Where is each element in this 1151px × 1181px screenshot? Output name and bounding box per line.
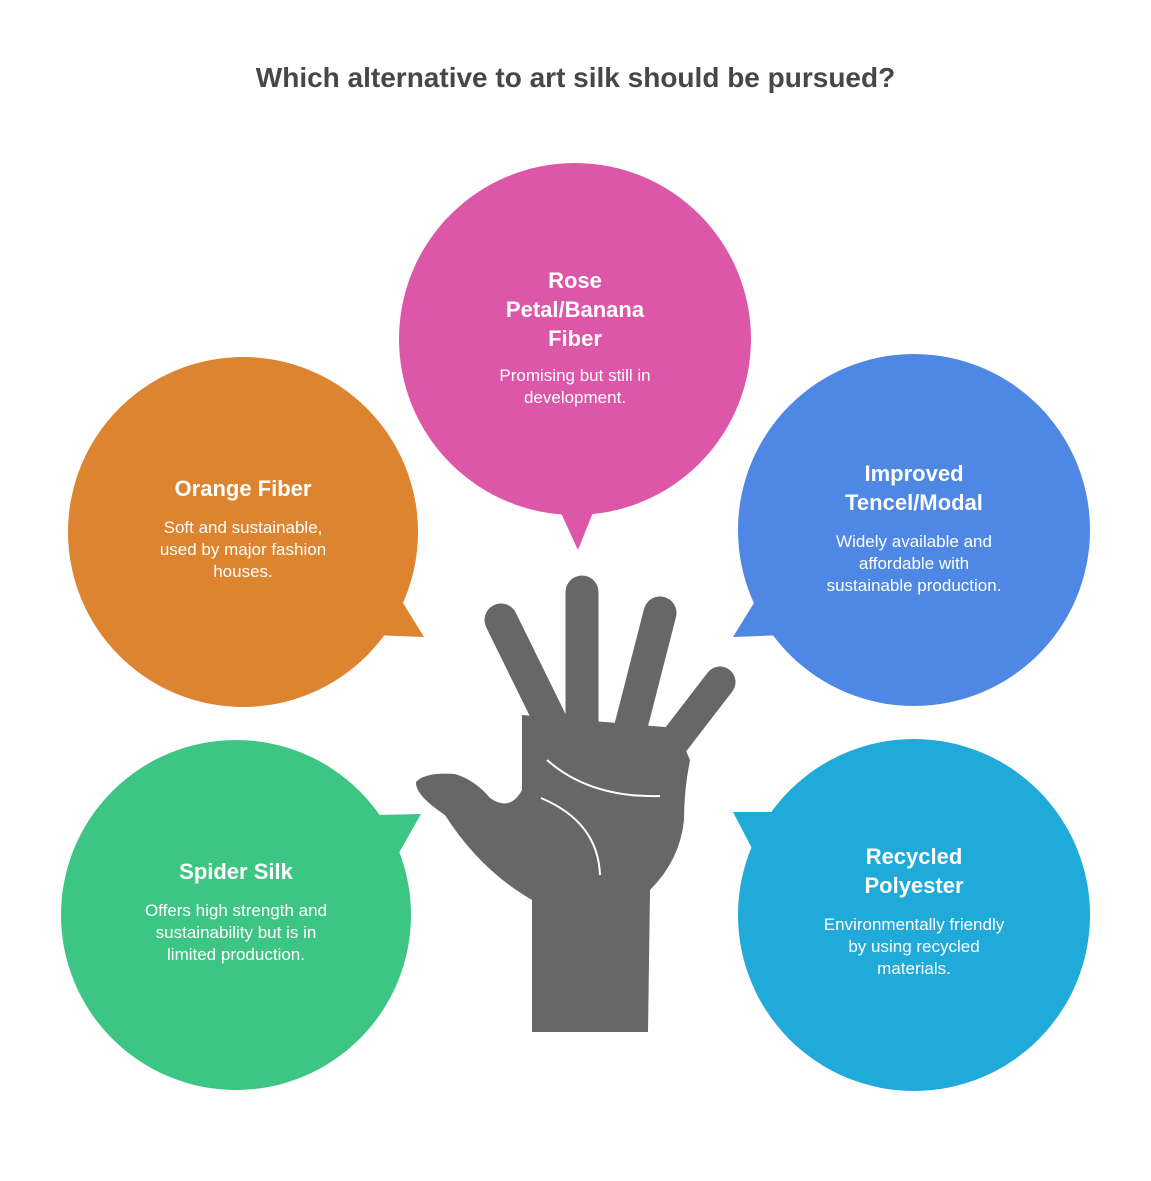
text: recycled polyester: Polyester (864, 873, 964, 898)
text: recycled polyester: Environmentally friendly (824, 915, 1004, 934)
icon: hand (416, 592, 720, 1032)
text: orange fiber: used by major fashion (160, 540, 326, 559)
text: spider silk: sustainability but is in (156, 923, 316, 942)
text: spider silk: Offers high strength and (145, 901, 327, 920)
text: orange fiber: houses. (213, 562, 273, 581)
text: recycled polyester: materials. (877, 959, 951, 978)
text: orange fiber (160, 476, 326, 581)
text: spider silk: limited production. (167, 945, 305, 964)
text: recycled polyester: Recycled (866, 844, 962, 869)
text: tencel (827, 461, 1001, 595)
text: spider silk (145, 859, 327, 964)
text: tencel: affordable with (859, 554, 969, 573)
bubble: orange fiber (68, 357, 424, 707)
text: tencel: Improved (864, 461, 964, 486)
text: recycled polyester: by using recycled (848, 937, 980, 956)
bubble: recycled polyester (733, 739, 1090, 1091)
text: rose petal: Fiber (548, 326, 602, 351)
text: orange fiber: Soft and sustainable, (164, 518, 322, 537)
text: orange fiber: Orange Fiber (175, 476, 311, 501)
text: tencel: sustainable production. (827, 576, 1001, 595)
text: spider silk: Spider Silk (179, 859, 293, 884)
bubble: spider silk (61, 740, 421, 1090)
text: tencel: Tencel/Modal (845, 490, 983, 515)
text: rose petal: Promising but still in (499, 366, 651, 385)
text: tencel: Widely available and (836, 532, 992, 551)
text: recycled polyester (824, 844, 1004, 978)
bubble: tencel (733, 354, 1090, 706)
text: rose petal: Petal/Banana (506, 297, 644, 322)
text: rose petal (499, 268, 651, 407)
text: rose petal: development. (524, 388, 626, 407)
text: rose petal: Rose (548, 268, 602, 293)
title: Which alternative to art silk should be pursued? (256, 62, 895, 93)
bubble: rose petal (399, 163, 751, 550)
